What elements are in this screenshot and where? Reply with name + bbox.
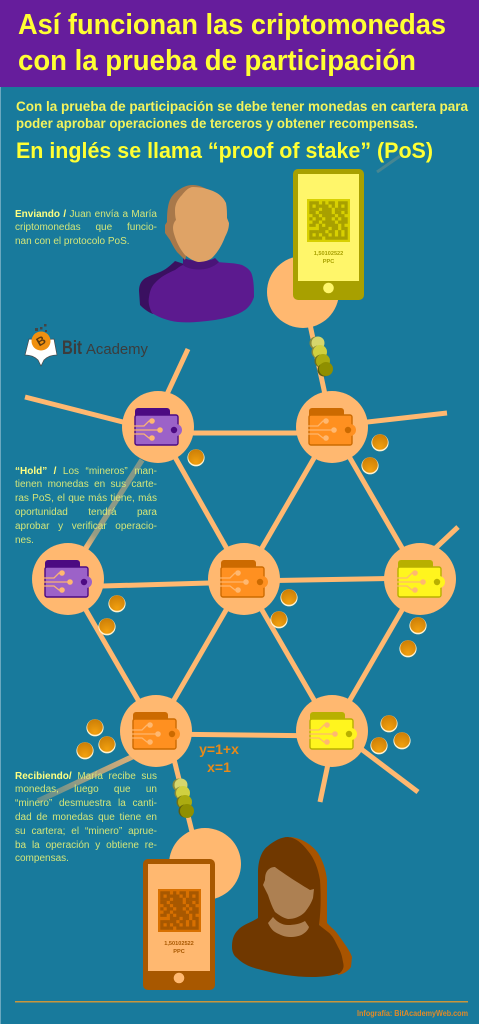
- formula: x=1: [207, 759, 231, 775]
- text block: Enviando: nan con el protocolo PoS.: [15, 236, 130, 247]
- icon: book with coin: B: [34, 333, 49, 349]
- coin stack: bottom: [172, 778, 194, 818]
- wallet address: 1,50102522: [314, 251, 343, 257]
- wallet address: PPC: [323, 259, 334, 265]
- text block: Hold: aprobar y verificar operacio-: [15, 521, 157, 532]
- text block: Enviando: [15, 209, 157, 247]
- text block: Recibiendo: monedas, luego que un: [15, 784, 157, 795]
- title banner: Así funcionan las criptomonedas: [18, 9, 446, 41]
- intro text: Con la prueba de participación se debe tener monedas en cartera para: [16, 99, 468, 114]
- title banner: [0, 0, 479, 87]
- text block: Hold: [15, 466, 157, 546]
- network lines: [25, 156, 458, 864]
- formula: y=1+x: [199, 741, 239, 757]
- wallets: [44, 408, 445, 749]
- intro text: poder aprobar operaciones de terceros y obtener recompensas.: [16, 116, 418, 131]
- network nodes: [32, 256, 456, 900]
- text block: Recibiendo: su cartera; el “minero” aprue-: [15, 826, 157, 837]
- text block: Hold: nes.: [15, 535, 34, 546]
- wallet address: PPC: [173, 949, 185, 955]
- wordmark: [62, 338, 149, 359]
- QR code: [307, 199, 350, 242]
- text block: Enviando: Enviando / Juan envía a María: [15, 209, 157, 220]
- footer credit: Infografía: BitAcademyWeb.com: [357, 1009, 468, 1018]
- text block: Hold: tienen monedas en sus carte-: [15, 479, 157, 490]
- icon: María person: [232, 837, 352, 977]
- wordmark: Academy: [86, 342, 149, 358]
- coin stack: top: [310, 336, 333, 376]
- wallet: orange 6: [132, 712, 180, 749]
- wallet: yellow 7: [309, 712, 357, 749]
- text block: Hold: oportunidad tendrá para: [15, 507, 157, 518]
- logo: BitAcademy: [25, 324, 149, 366]
- wallet address: [314, 251, 343, 265]
- heading: proof of stake: En inglés se llama “proof of stake” (PoS): [16, 138, 433, 163]
- text block: Recibiendo: [15, 771, 157, 864]
- title banner: con la prueba de participación: [18, 45, 416, 77]
- wallet: purple 3: [44, 560, 92, 597]
- formula: [199, 741, 239, 775]
- wallet address: 1,50102522: [164, 941, 194, 947]
- wallet: yellow 5: [397, 560, 445, 597]
- text block: Recibiendo: “minero” desmuestra la canti-: [15, 798, 157, 809]
- text block: Hold: ras PoS, el que más tiene, más: [15, 493, 157, 504]
- wallet address: [164, 941, 194, 955]
- text block: Recibiendo: ba la operación y obtiene re-: [15, 840, 157, 851]
- icon: top phone: [293, 169, 364, 300]
- text block: Recibiendo: Recibiendo/ María recibe sus: [15, 771, 157, 782]
- wallet: orange 4: [220, 560, 268, 597]
- intro text: [16, 99, 468, 131]
- coins: [76, 434, 427, 759]
- text block: Recibiendo: dad de monedas que tiene en: [15, 812, 157, 823]
- QR code: [158, 889, 201, 932]
- wordmark: Bit: [62, 338, 83, 359]
- text block: Hold: “Hold” / Los “mineros” man-: [15, 466, 157, 477]
- icon: bottom phone: [143, 859, 215, 990]
- text block: Enviando: criptomonedas que funcio-: [15, 222, 157, 233]
- wallet: orange 2: [308, 408, 356, 445]
- text block: Recibiendo: compensas.: [15, 853, 69, 864]
- icon: Juan person: [139, 185, 254, 322]
- wallet: purple 1: [134, 408, 182, 445]
